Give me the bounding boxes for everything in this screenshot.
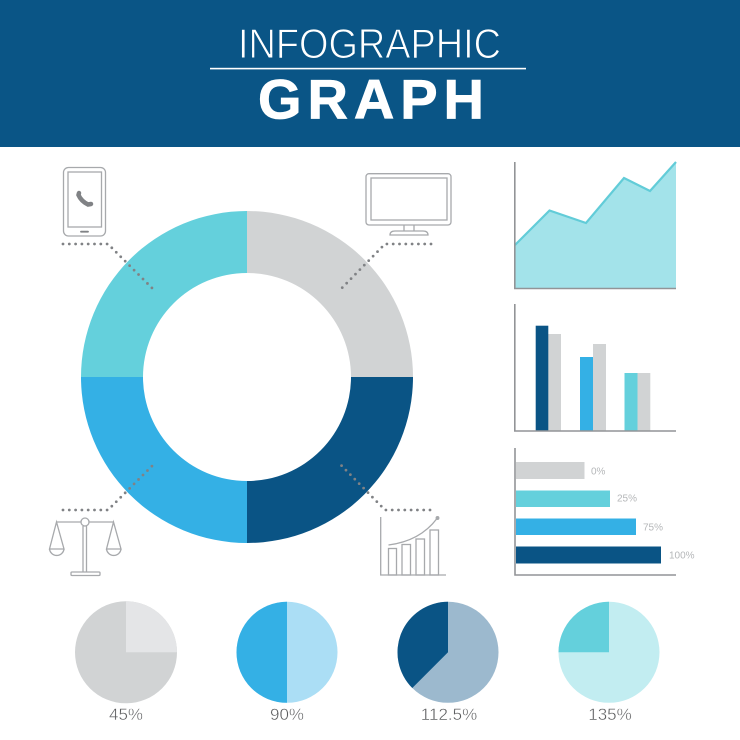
- header banner: [0, 0, 740, 147]
- bar labels: 0%: [591, 466, 606, 478]
- area fill: [515, 162, 676, 288]
- pie: 45%: 45%: [109, 705, 143, 724]
- pie: 135%: [558, 602, 660, 724]
- icon: monitor: [366, 174, 451, 235]
- pie: 135%: 135%: [588, 705, 632, 724]
- dotted leader: growth chart: [339, 463, 430, 510]
- horizontal bar chart: [515, 448, 695, 575]
- icon: growth chart: [381, 517, 446, 575]
- donut segment: dark blue: [247, 377, 413, 543]
- title rule: [210, 68, 526, 69]
- bar labels: 75%: [643, 522, 663, 534]
- dotted leader: monitor: [339, 244, 431, 291]
- area top line: [515, 162, 676, 245]
- bar labels: 100%: [669, 550, 695, 562]
- pie: 90%: 90%: [270, 705, 304, 724]
- bar labels: 25%: [617, 494, 637, 504]
- axes: [515, 162, 676, 288]
- dotted leader: scales: [63, 463, 155, 510]
- area chart: [515, 162, 676, 288]
- donut segment: teal: [81, 211, 247, 377]
- donut chart: [81, 211, 413, 543]
- bar labels: [591, 466, 695, 562]
- icon: balance scales: [50, 518, 121, 576]
- title: INFOGRAPHIC: INFOGRAPHIC: [238, 20, 501, 67]
- grouped bar chart: [515, 304, 676, 431]
- pie: 90%: [236, 602, 338, 724]
- title: GRAPH: GRAPH: [258, 68, 484, 130]
- donut segment: grey: [247, 211, 413, 377]
- pie: 45%: [75, 601, 177, 724]
- donut segment: blue: [81, 377, 247, 543]
- dotted leader: phone: [63, 244, 155, 291]
- pie: 112.5%: 112.5%: [421, 705, 477, 724]
- icon: smartphone: [64, 168, 106, 236]
- pie: 112.5%: [398, 602, 498, 724]
